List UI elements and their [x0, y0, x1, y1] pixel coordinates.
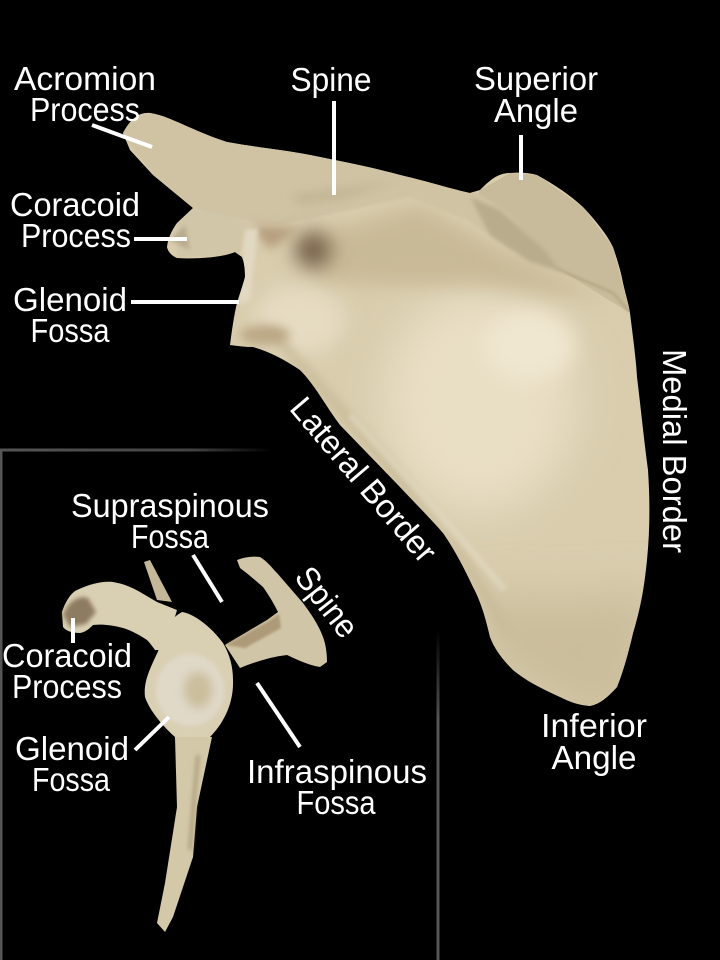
label: Supraspinous Fossa: Supraspinous: [71, 487, 269, 524]
label: Acromion Process: Acromion: [14, 60, 156, 97]
label: Spine inset: Spine: [288, 559, 366, 645]
label: Infraspinous Fossa: [247, 753, 427, 821]
inset glenoid: [145, 612, 233, 737]
label: Supraspinous Fossa: [71, 487, 269, 555]
label: Inferior Angle: [541, 707, 647, 776]
label: Supraspinous Fossa: Fossa: [131, 518, 210, 555]
label: Spine: Spine: [290, 61, 372, 98]
label: Coracoid Process inset: [2, 637, 132, 705]
label: Lateral Border: Lateral Border: [283, 390, 444, 569]
label: Coracoid Process inset: Coracoid: [2, 637, 132, 674]
label: Glenoid Fossa inset: [15, 730, 129, 798]
label: Inferior Angle: Angle: [552, 739, 636, 776]
label: Medial Border: Medial Border: [656, 349, 693, 553]
label: Infraspinous Fossa: Infraspinous: [247, 753, 427, 790]
label: Glenoid Fossa inset: Glenoid: [15, 730, 129, 767]
thin superior border: [144, 560, 172, 602]
label: Coracoid Process: [10, 186, 140, 254]
label: Glenoid Fossa: [13, 281, 127, 349]
inset scapula bone: [62, 557, 327, 932]
label: Superior Angle: [474, 60, 598, 129]
label: Glenoid Fossa: Glenoid: [13, 281, 127, 318]
label: Coracoid Process: Coracoid: [10, 186, 140, 223]
label: Coracoid Process: Process: [21, 217, 131, 254]
inset panel frame: [0, 450, 438, 960]
inset blade: [157, 737, 212, 932]
main scapula bone: [110, 110, 660, 720]
label: Superior Angle: Angle: [494, 92, 578, 129]
inset coracoid: [62, 582, 177, 650]
label: Coracoid Process inset: Process: [12, 668, 122, 705]
label: Inferior Angle: Inferior: [541, 707, 647, 744]
label: Infraspinous Fossa: Fossa: [296, 784, 376, 821]
label: Superior Angle: Superior: [474, 60, 598, 97]
label: Glenoid Fossa: Fossa: [30, 312, 110, 349]
label: Acromion Process: Process: [30, 91, 140, 128]
label: Acromion Process: [14, 60, 156, 128]
inset spine: [225, 557, 327, 668]
leader lines: [73, 101, 521, 750]
label: Glenoid Fossa inset: Fossa: [32, 761, 111, 798]
